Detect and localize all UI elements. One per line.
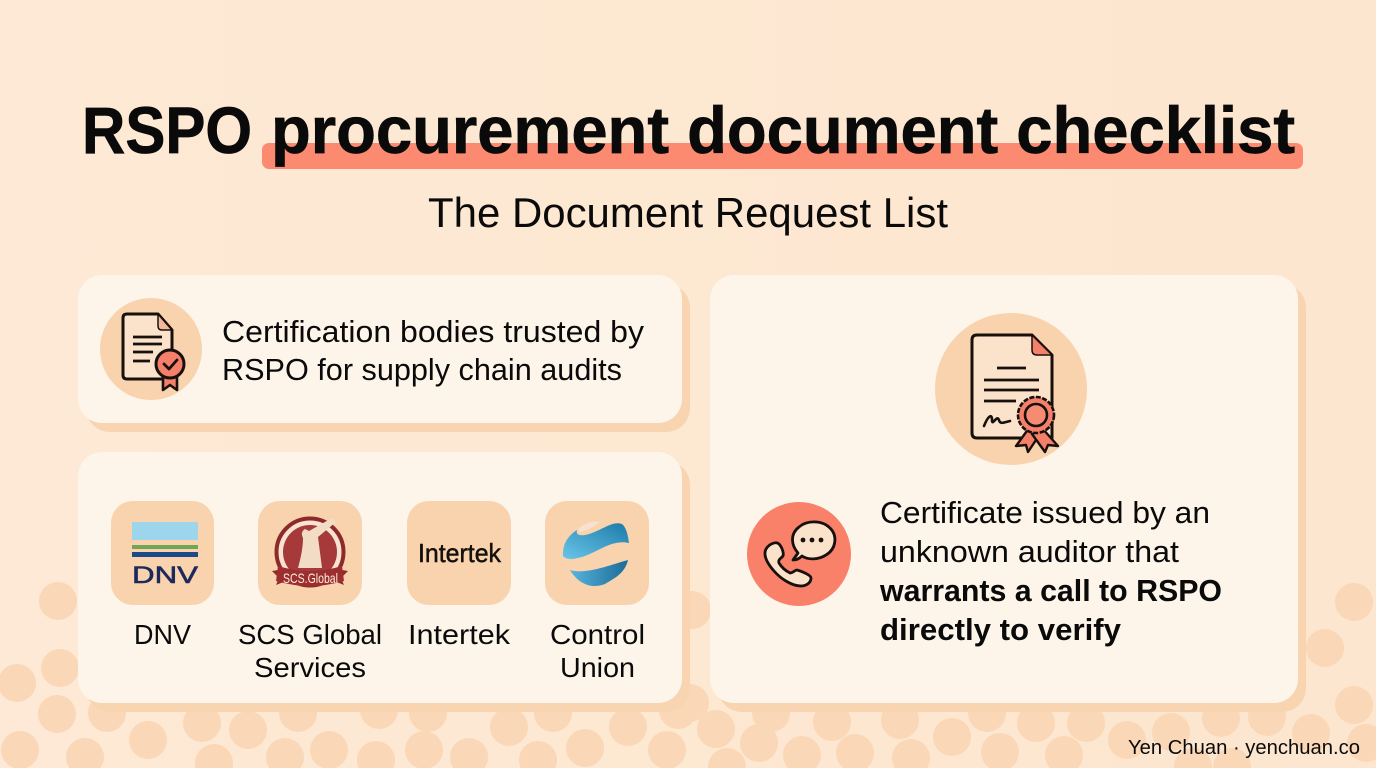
warning text: Certificate issued by an [880, 495, 1210, 530]
logo: SCS Global Services [258, 501, 362, 605]
heading text [222, 314, 645, 387]
panel: certification body logos [78, 452, 690, 712]
logo: Intertek: Intertek [418, 538, 502, 568]
label: SCS Global Services [238, 619, 382, 683]
logo: SCS Global Services: SCS.Global [283, 570, 338, 586]
logo: DNV [111, 501, 214, 605]
warning text: warrants a call to RSPO [879, 573, 1222, 608]
panel: certification bodies heading [78, 275, 690, 432]
logo: Control Union [545, 501, 649, 605]
warning text: unknown auditor that [880, 534, 1179, 569]
warning text [879, 495, 1222, 647]
footer credit: Yen Chuan · yenchuan.co [1128, 737, 1360, 759]
icon: phone with speech bubble [747, 502, 851, 606]
heading text: RSPO for supply chain audits [222, 352, 622, 387]
label: Control Union [550, 619, 645, 683]
label: SCS Global Services: Services [254, 652, 366, 683]
heading text: Certification bodies trusted by [222, 314, 645, 349]
icon: certificate with rosette [935, 313, 1087, 465]
label: Control Union: Union [560, 652, 635, 683]
label: DNV: DNV [134, 619, 191, 650]
logo: Intertek [407, 501, 511, 605]
title: procurement document checklist [271, 93, 1295, 167]
panel: unknown auditor warning [710, 275, 1306, 712]
logo: DNV: DNV [132, 562, 198, 589]
warning text: directly to verify [880, 612, 1122, 647]
subtitle: The Document Request List [428, 189, 948, 236]
label: SCS Global Services: SCS Global [238, 619, 382, 650]
label: Intertek: Intertek [408, 619, 511, 650]
title: RSPO [82, 93, 252, 167]
icon: document with check badge [100, 298, 202, 400]
label: Control Union: Control [550, 619, 645, 650]
